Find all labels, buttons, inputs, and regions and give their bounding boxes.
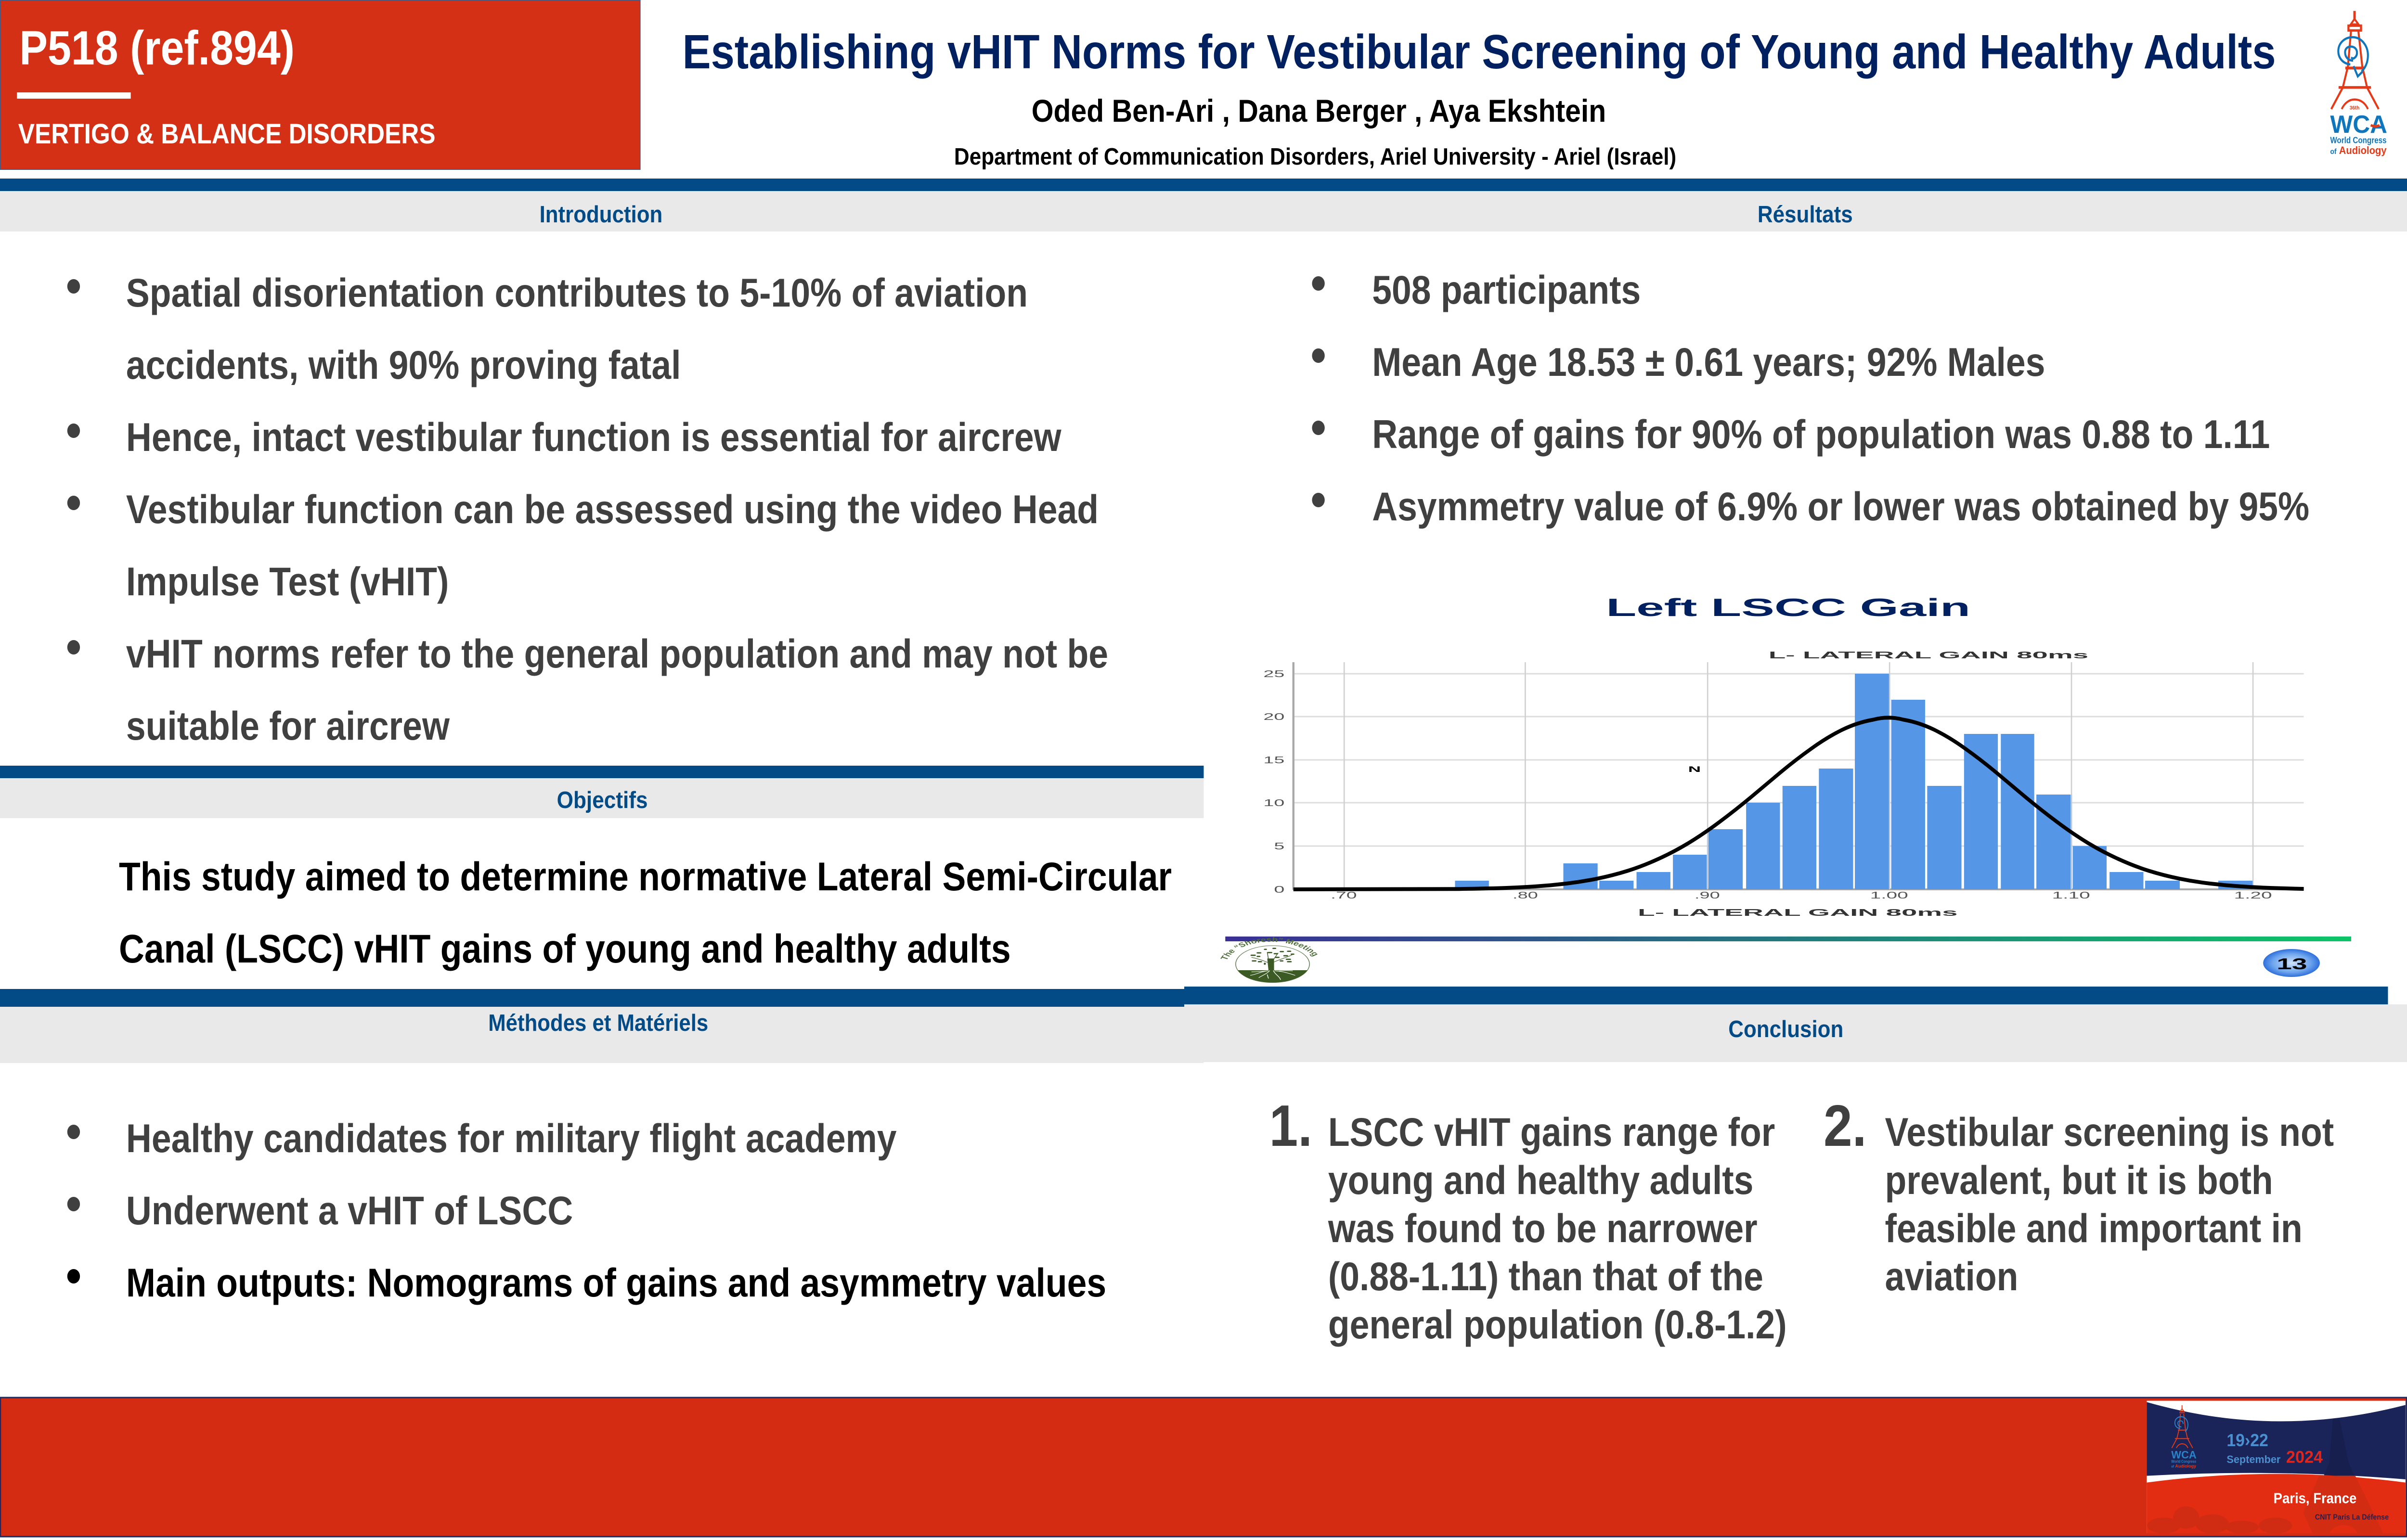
panel: results bullets: Mean Age 18.53 ± 0.61 years; 92% Males [1372, 340, 2045, 385]
icon: WCA logo: Audiology [2339, 145, 2387, 156]
heading: conclusion: Conclusion [1728, 1015, 1843, 1042]
icon: Shoresh Meeting logo: The “Shoresh” Meeting [1220, 937, 1318, 960]
panel: results bullets [1312, 268, 2309, 529]
histogram chart: .90 [1695, 890, 1720, 900]
histogram chart: 20 [1263, 711, 1284, 722]
icon: Shoresh Meeting logo [1220, 937, 1318, 983]
page number badge: 13 [2277, 956, 2307, 973]
histogram chart: 10 [1263, 797, 1284, 808]
icon: WCA logo: WCA [2330, 111, 2387, 139]
panel: objectives text: Canal (LSCC) vHIT gains of young and healthy adults [119, 926, 1011, 971]
panel: results bullets: Range of gains for 90% of population was 0.88 to 1.11 [1372, 412, 2270, 457]
icon: WCA logo: World Congress [2330, 135, 2387, 145]
icon: WCA logo: of [2330, 147, 2337, 156]
histogram chart: N [1688, 765, 1701, 774]
panel: methods bullets: Underwent a vHIT of LSCC [126, 1188, 573, 1233]
histogram chart: 0 [1274, 884, 1284, 895]
chart heading: Left LSCC Gain [1606, 594, 1970, 622]
panel: conclusion item 2: prevalent, but it is both [1885, 1158, 2273, 1203]
panel: objectives text [119, 854, 1172, 971]
heading: results: Résultats [1758, 201, 1853, 228]
panel: conclusion item 1: young and healthy adults [1328, 1158, 1753, 1203]
panel: results bullets: Asymmetry value of 6.9% or lower was obtained by 95% [1372, 484, 2309, 529]
histogram chart: 5 [1274, 841, 1284, 851]
congress banner: 19›22 [2226, 1431, 2268, 1450]
panel: introduction bullets: Spatial disorientation contributes to 5-10% of aviation [126, 270, 1028, 315]
panel: conclusion item 1: LSCC vHIT gains range for [1328, 1110, 1775, 1155]
panel: methods bullets: Main outputs: Nomograms of gains and asymmetry values [126, 1260, 1106, 1305]
panel: conclusion item 2: aviation [1885, 1254, 2018, 1299]
footer band [0, 1398, 2407, 1537]
small WCA logo: World Congress [2171, 1459, 2196, 1464]
panel: introduction bullets: vHIT norms refer to the general population and may not be [126, 631, 1108, 676]
panel: introduction bullets: Impulse Test (vHIT) [126, 559, 449, 604]
topic label: VERTIGO & BALANCE DISORDERS [18, 118, 436, 150]
heading: objectives: Objectifs [557, 786, 648, 813]
panel: conclusion item 2: feasible and important in [1885, 1206, 2303, 1251]
panel: introduction bullets: Vestibular function can be assessed using the video Head [126, 487, 1099, 532]
icon: WCA logo: 36th [2350, 105, 2359, 111]
histogram chart: .80 [1513, 890, 1538, 900]
poster code panel [0, 0, 640, 169]
panel: objectives text: This study aimed to determine normative Lateral Semi-Circular [119, 854, 1172, 899]
congress banner: 2024 [2286, 1448, 2323, 1467]
title: Establishing vHIT Norms for Vestibular Screening of Young and Healthy Adults [683, 25, 2276, 78]
histogram chart [1263, 650, 2304, 918]
panel: conclusion item 1: (0.88-1.11) than that of the [1328, 1254, 1763, 1299]
panel: introduction bullets: Hence, intact vestibular function is essential for aircrew [126, 415, 1062, 460]
histogram chart: 1.00 [1870, 890, 1908, 900]
authors: Oded Ben-Ari , Dana Berger , Aya Ekshtein [1032, 94, 1606, 129]
panel: introduction bullets [67, 270, 1108, 748]
congress banner: September [2226, 1454, 2281, 1466]
histogram chart: L- LATERAL GAIN 80ms [1638, 907, 1958, 918]
heading: introduction: Introduction [540, 201, 662, 228]
small WCA logo: Audiology [2175, 1463, 2196, 1469]
histogram chart: 15 [1263, 755, 1284, 765]
panel: conclusion item 2: 2. [1824, 1093, 1866, 1159]
poster code: P518 (ref.894) [19, 21, 295, 75]
panel: conclusion item 1: was found to be narrower [1328, 1206, 1758, 1251]
congress banner [2147, 1401, 2406, 1534]
panel: methods bullets [67, 1116, 1106, 1305]
heading: methods: Méthodes et Matériels [488, 1009, 708, 1036]
panel: conclusion item 1 [1269, 1093, 1787, 1347]
panel: results bullets: 508 participants [1372, 268, 1641, 312]
small WCA logo: WCA [2171, 1449, 2197, 1461]
page number badge [2263, 949, 2320, 977]
small WCA logo [2171, 1405, 2197, 1469]
histogram chart: 25 [1263, 668, 1284, 679]
histogram chart: 1.20 [2234, 890, 2272, 900]
histogram chart: L- LATERAL GAIN 80ms [1769, 650, 2088, 660]
histogram chart: 1.10 [2052, 890, 2090, 900]
panel: conclusion item 2 [1824, 1093, 2334, 1299]
small WCA logo: of [2171, 1465, 2174, 1469]
affiliation: Department of Communication Disorders, Ariel University - Ariel (Israel) [954, 143, 1676, 170]
histogram chart: .70 [1331, 890, 1357, 900]
panel: methods bullets: Healthy candidates for military flight academy [126, 1116, 897, 1161]
panel: introduction bullets: suitable for aircrew [126, 704, 450, 748]
panel: conclusion item 1: 1. [1269, 1093, 1312, 1159]
panel: conclusion item 2: Vestibular screening is not [1885, 1110, 2334, 1155]
panel: conclusion item 1: general population (0.8-1.2) [1328, 1302, 1787, 1347]
icon: WCA logo [2330, 11, 2387, 156]
congress banner: Paris, France [2274, 1490, 2356, 1506]
panel: introduction bullets: accidents, with 90% proving fatal [126, 343, 681, 387]
congress banner: CNIT Paris La Défense [2315, 1513, 2389, 1521]
